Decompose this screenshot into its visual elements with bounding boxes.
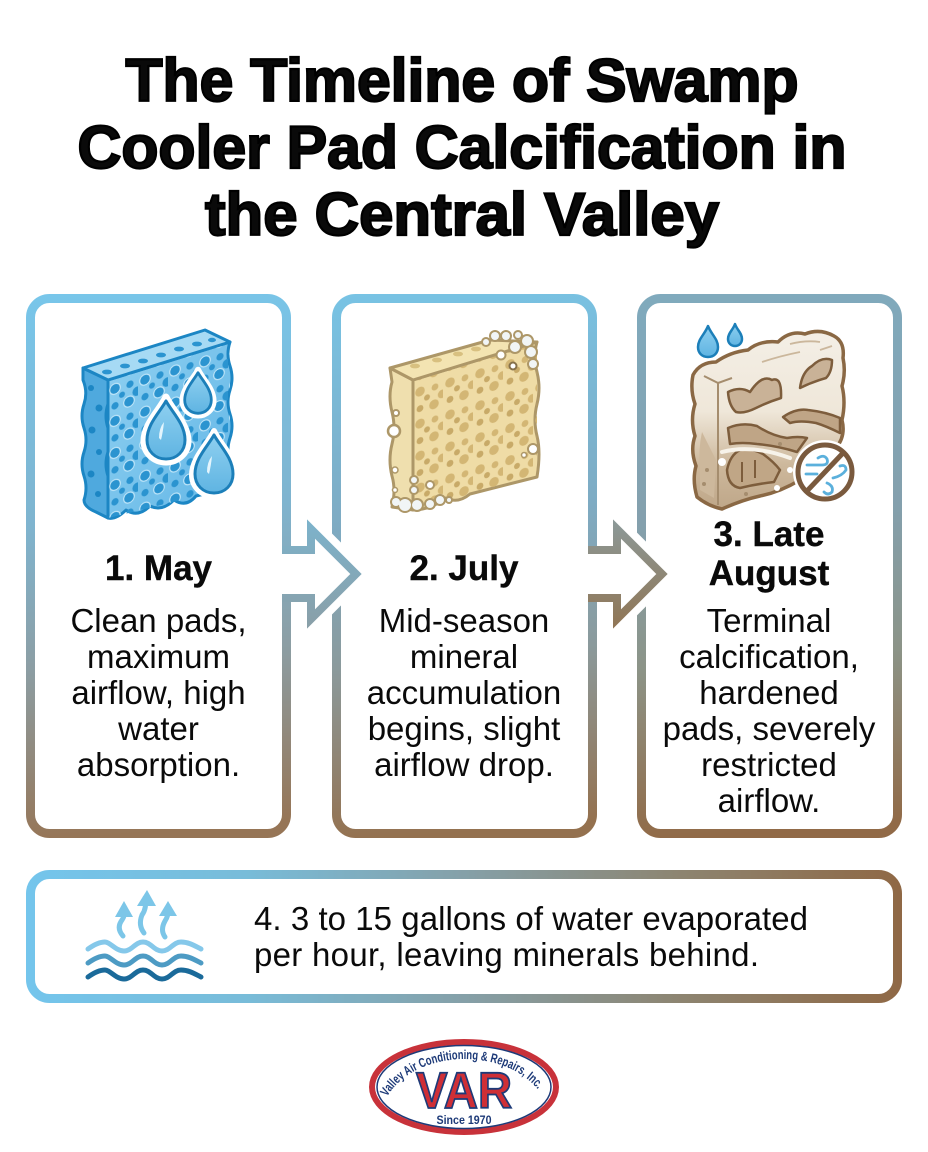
title [78, 47, 847, 248]
heading: 3. Late August [709, 515, 830, 593]
heading: 1. May: 1. May [105, 549, 213, 588]
heading: 3. Late August: 3. Late [714, 515, 824, 554]
text block: July description: begins, slight [368, 710, 560, 747]
text block: Late August description: pads, severely [663, 710, 876, 747]
text block: July description: Mid-season [379, 602, 549, 639]
icon: evaporating water [88, 890, 201, 979]
text block: evaporation fact: per hour, leaving minerals behind. [254, 936, 759, 973]
panel: July card frame [336, 298, 592, 834]
text block: May description [70, 602, 247, 783]
logo: Valley Air Conditioning & Repairs: Since 1970 [436, 1113, 492, 1127]
text block: May description: absorption. [77, 746, 240, 783]
text block: Late August description [663, 602, 876, 819]
title: the Central Valley [205, 181, 720, 248]
text block: Late August description: hardened [699, 674, 839, 711]
text block: May description: Clean pads, [70, 602, 247, 639]
text block: Late August description: Terminal [707, 602, 831, 639]
icon: calcified pad with blocked airflow [692, 324, 857, 509]
text block: July description: mineral [410, 638, 518, 675]
logo: Valley Air Conditioning & Repairs [369, 1039, 559, 1135]
text block: Late August description: restricted [701, 746, 837, 783]
panel: May card frame [30, 298, 286, 834]
icon: clean blue pad with water drops [80, 328, 234, 520]
icon: yellowed pad with mineral foam [388, 330, 545, 520]
heading: 2. July: 2. July [410, 549, 519, 588]
text block: July description [367, 602, 561, 783]
text block: July description: accumulation [367, 674, 561, 711]
panel: evaporation fact [30, 874, 898, 998]
text block: evaporation fact [254, 900, 808, 973]
heading: 3. Late August: August [709, 554, 830, 593]
text block: Late August description: calcification, [679, 638, 859, 675]
logo: Valley Air Conditioning & Repairs: Valley Air Conditioning & Repairs, Inc. [380, 1050, 540, 1095]
title: Cooler Pad Calcification in [78, 114, 847, 181]
text block: Late August description: airflow. [718, 782, 820, 819]
panel: Late August card frame [642, 298, 898, 834]
arrow: July to Late August [586, 526, 665, 622]
text block: May description: airflow, high [71, 674, 246, 711]
arrow: May to July [280, 526, 359, 622]
text block: May description: maximum [87, 638, 230, 675]
text block: evaporation fact: 4. 3 to 15 gallons of water evaporated [254, 900, 808, 937]
text block: July description: airflow drop. [374, 746, 554, 783]
logo: Valley Air Conditioning & Repairs: VAR [416, 1062, 512, 1119]
title: The Timeline of Swamp [126, 47, 798, 114]
text block: May description: water [117, 710, 199, 747]
